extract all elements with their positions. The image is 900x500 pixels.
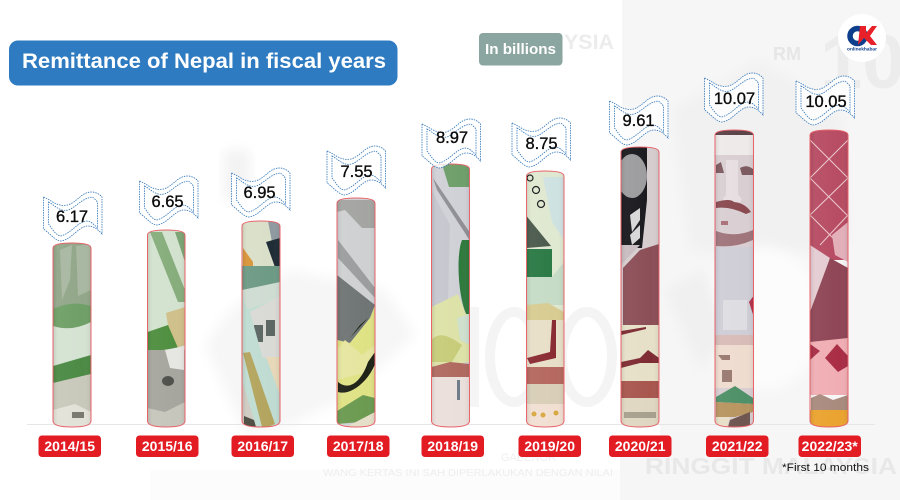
value: 6.65: 6.65 <box>151 193 184 211</box>
value: 8.97 <box>422 119 480 168</box>
value: 10.07: 10.07 <box>714 90 755 108</box>
logo: onlinekhabar: onlinekhabar <box>847 46 877 52</box>
year: 2022/23 <box>798 436 861 457</box>
title: Remittance of Nepal in fiscal years <box>22 50 386 73</box>
year: 2019/20 <box>518 436 581 457</box>
logo: onlinekhabar <box>838 14 886 62</box>
title <box>9 40 398 86</box>
footnote: *First 10 months <box>782 462 870 474</box>
value note labels <box>44 73 854 241</box>
unit badge <box>479 33 562 66</box>
value: 7.55: 7.55 <box>340 163 373 181</box>
bar: 2021/22 <box>715 130 754 427</box>
year labels <box>38 436 861 457</box>
year: 2014/15: 2014/15 <box>44 438 95 454</box>
chart: remittance cylinders <box>53 130 848 427</box>
background: faint banknote watermark: GABENOR <box>501 452 556 464</box>
value: 8.97: 8.97 <box>436 129 468 147</box>
year: 2017/18: 2017/18 <box>333 438 384 454</box>
background: faint banknote watermark: RM <box>773 44 801 64</box>
background: faint banknote watermark: YSIA <box>564 31 614 54</box>
background: faint banknote watermark: WANG KERTAS INI SAH DIPERLAKUKAN DENGAN NILAI <box>323 467 613 479</box>
value: 6.95: 6.95 <box>243 184 276 202</box>
year: 2016/17: 2016/17 <box>237 438 288 454</box>
background: faint banknote watermark: RINGGIT MALAYSIA <box>645 453 897 479</box>
year: 2021/22 <box>706 436 768 457</box>
year: 2015/16 <box>136 436 198 457</box>
value: 6.95 <box>232 168 290 217</box>
year: 2022/23: 2022/23* <box>802 438 858 454</box>
year: 2019/20: 2019/20 <box>524 438 575 454</box>
year: 2017/18 <box>327 436 390 457</box>
year: 2018/19 <box>422 436 484 457</box>
bar: 2017/18 <box>337 198 375 427</box>
value: 6.17 <box>44 192 102 241</box>
value: 8.75: 8.75 <box>525 135 558 153</box>
value: 9.61 <box>610 96 668 145</box>
year: 2016/17 <box>232 436 294 457</box>
value: 10.05 <box>796 76 854 125</box>
value: 8.75 <box>512 118 570 167</box>
bar: 2020/21 <box>617 147 659 427</box>
bar: 2022/23 <box>810 130 848 427</box>
year: 2015/16: 2015/16 <box>142 438 193 454</box>
year: 2021/22: 2021/22 <box>712 438 763 454</box>
year: 2018/19: 2018/19 <box>427 438 478 454</box>
value: 9.61: 9.61 <box>622 112 655 130</box>
value: 7.55 <box>327 146 386 195</box>
value: 10.05: 10.05 <box>805 93 847 111</box>
unit badge: In billions <box>485 42 556 58</box>
value: 6.65 <box>140 176 198 225</box>
bar: 2015/16 <box>148 230 185 427</box>
bar: 2018/19 <box>432 164 470 427</box>
value: 10.07 <box>704 73 763 122</box>
value: 6.17: 6.17 <box>56 208 88 226</box>
bar: 2016/17 <box>242 221 280 427</box>
bar: 2019/20 <box>526 171 564 427</box>
baseline <box>27 424 875 425</box>
bar: 2014/15 <box>53 243 91 427</box>
year: 2020/21 <box>609 436 672 457</box>
year: 2020/21: 2020/21 <box>615 438 666 454</box>
year: 2014/15 <box>38 436 101 457</box>
